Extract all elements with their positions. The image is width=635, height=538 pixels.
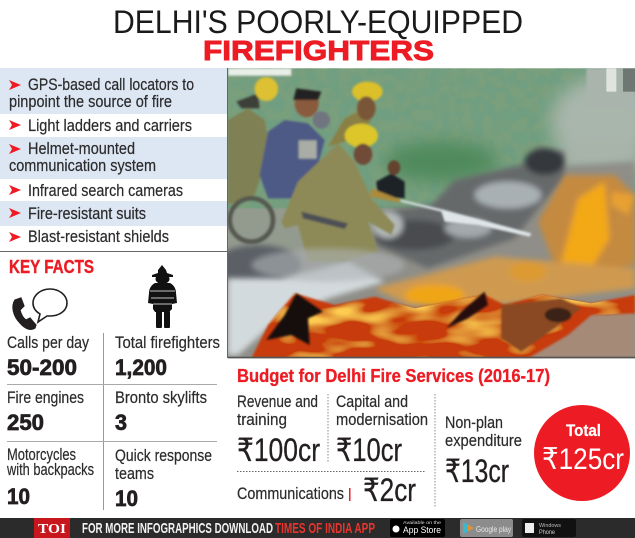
- fact: motorcycles: 10: [7, 484, 30, 509]
- budget item: non-plan expenditure: ₹13cr: [445, 453, 509, 489]
- list item: ladders: Light ladders and carriers: [28, 117, 192, 135]
- total callout: [534, 405, 630, 501]
- fact: motorcycles: with backpacks: [6, 461, 94, 479]
- ground haze: [228, 162, 635, 360]
- fact: calls per day: [7, 334, 90, 380]
- badge: google play: [460, 519, 513, 537]
- panel: equipment list: communication system: [9, 157, 156, 175]
- list item: shields: Blast-resistant shields: [28, 228, 169, 246]
- icon: phone and speech bubble: [13, 289, 67, 329]
- badge: google play: Google play: [476, 525, 511, 534]
- fact: total firefighters: 1,200: [115, 355, 167, 380]
- fact: motorcycles: Motorcycles: [7, 446, 76, 464]
- footer text: FOR MORE INFOGRAPHICS DOWNLOAD: [82, 520, 273, 537]
- bottom fire: [251, 293, 635, 358]
- badge: app store: Available on the: [403, 520, 442, 525]
- fact: fire engines: Fire engines: [7, 389, 84, 407]
- fact: fire engines: 250: [7, 410, 44, 435]
- budget item: communications: Communications: [237, 485, 344, 503]
- fact: quick response teams: Quick response: [115, 447, 212, 465]
- budget item: non-plan expenditure: [445, 414, 522, 489]
- budget item: revenue and training: Revenue and: [237, 393, 318, 411]
- budget item: non-plan expenditure: expenditure: [445, 432, 522, 450]
- panel: equipment list: [0, 68, 227, 246]
- budget item: revenue and training: ₹100cr: [237, 432, 320, 468]
- footer bar: TIMES OF INDIA APP: [275, 520, 375, 537]
- panel: equipment list: pinpoint the source of fire: [9, 93, 172, 111]
- list item: helmet: Helmet-mounted: [28, 140, 135, 158]
- fact: calls per day: 50-200: [7, 355, 77, 380]
- budget item: non-plan expenditure: Non-plan: [445, 414, 503, 432]
- budget item: capital and modernisation: [336, 393, 428, 468]
- budget heading: Budget for Delhi Fire Services (2016-17): [237, 366, 550, 386]
- panel: key facts: [6, 257, 220, 511]
- fact: bronto skylifts: 3: [115, 410, 127, 435]
- badge: windows phone: Phone: [539, 530, 556, 536]
- badge: app store: App Store: [403, 525, 441, 535]
- photo: firefighters hosing a burning heap: [215, 65, 635, 360]
- fact: total firefighters: [115, 334, 220, 380]
- fact: quick response teams: [115, 447, 212, 511]
- footer bar: [0, 518, 635, 538]
- fact: quick response teams: 10: [115, 486, 138, 511]
- smoke: [228, 262, 385, 355]
- TOI logo: [34, 518, 70, 538]
- budget item: communications: ₹2cr: [363, 472, 416, 508]
- key facts heading: KEY FACTS: [9, 257, 94, 277]
- badge: windows phone: [522, 519, 576, 537]
- list item: suits: Fire-resistant suits: [28, 205, 146, 223]
- budget item: capital and modernisation: ₹10cr: [336, 432, 402, 468]
- flames right: [375, 175, 635, 306]
- icon: firefighter: [148, 265, 177, 328]
- fact: motorcycles: [6, 446, 94, 509]
- fact: total firefighters: Total firefighters: [115, 334, 220, 352]
- list item: GPS: GPS-based call locators to: [28, 76, 194, 94]
- total callout: ₹125cr: [542, 443, 624, 476]
- bottom ground: [530, 302, 635, 358]
- title line 2: FIREFIGHTERS: [203, 35, 434, 66]
- budget item: capital and modernisation: modernisation: [336, 411, 428, 429]
- fact: fire engines: [7, 389, 84, 435]
- fact: bronto skylifts: [115, 389, 207, 435]
- panel: budget: [237, 366, 630, 508]
- hose spray: [401, 200, 531, 237]
- figures: [228, 77, 405, 262]
- smoke over lower figures: [251, 248, 405, 282]
- list item: cameras: Infrared search cameras: [28, 182, 183, 200]
- badge: app store: [390, 519, 445, 537]
- fact: bronto skylifts: Bronto skylifts: [115, 389, 207, 407]
- foliage: [228, 65, 635, 208]
- TOI logo: TOI: [38, 522, 66, 537]
- budget item: revenue and training: training: [237, 411, 287, 429]
- rubble: [215, 147, 565, 285]
- badge: windows phone: Windows: [539, 523, 562, 529]
- budget item: communications: [237, 472, 416, 508]
- budget item: revenue and training: [237, 393, 320, 468]
- total callout: Total: [566, 421, 601, 440]
- budget item: capital and modernisation: Capital and: [336, 393, 408, 411]
- fact: calls per day: Calls per day: [7, 334, 90, 352]
- fact: quick response teams: teams: [115, 465, 154, 483]
- title line 1: DELHI'S POORLY-EQUIPPED: [113, 4, 523, 40]
- title: [113, 4, 523, 66]
